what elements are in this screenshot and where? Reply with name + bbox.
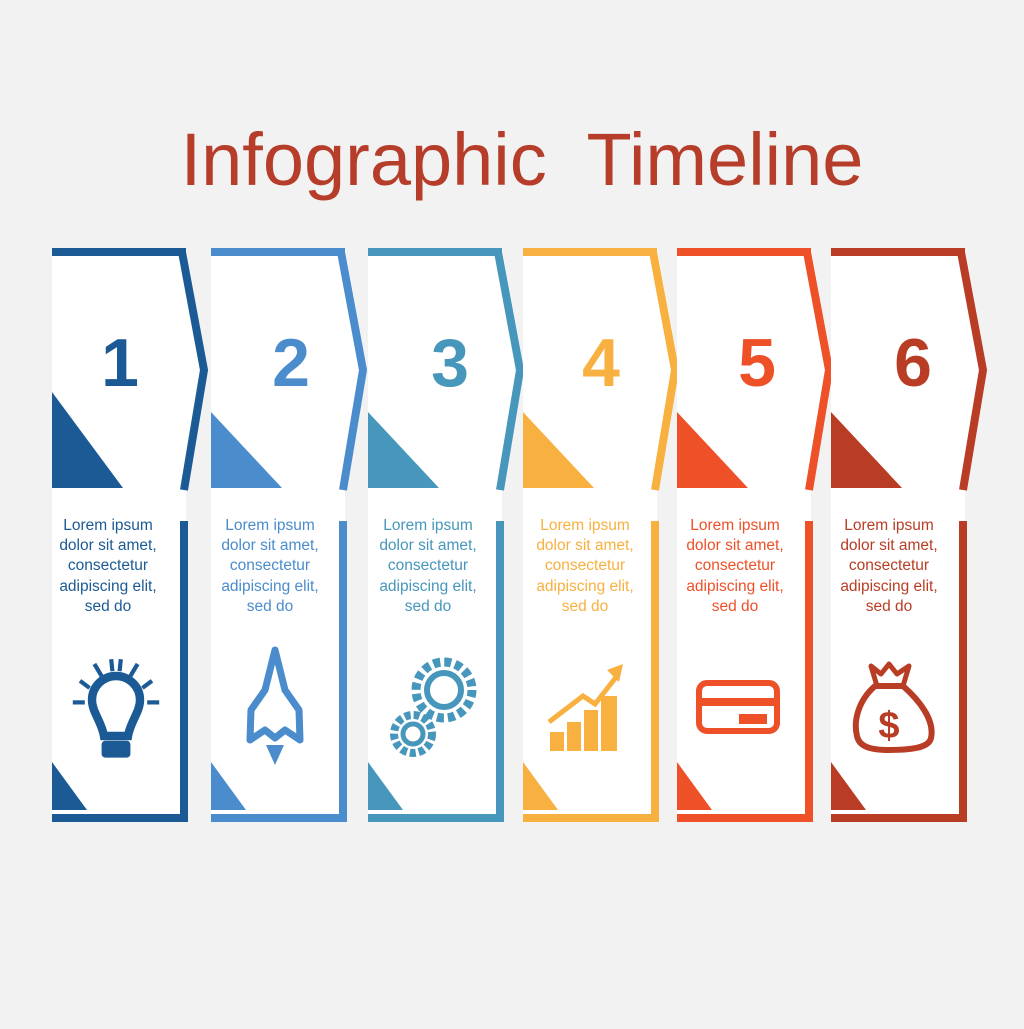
text 1: adipiscing elit, bbox=[59, 578, 157, 595]
text 6: sed do bbox=[866, 598, 912, 615]
text 3: adipiscing elit, bbox=[379, 578, 477, 595]
text 2: Lorem ipsum bbox=[225, 517, 315, 534]
card 5 bbox=[677, 248, 833, 822]
icon: rocket bbox=[250, 650, 300, 765]
icon: money bag bbox=[856, 664, 932, 750]
text 4: sed do bbox=[562, 598, 608, 615]
text 6: consectetur bbox=[849, 557, 929, 574]
text 1: dolor sit amet, bbox=[59, 537, 157, 554]
text 3: sed do bbox=[405, 598, 451, 615]
icon: gears bbox=[394, 662, 472, 753]
text 5: consectetur bbox=[695, 557, 775, 574]
text 4: adipiscing elit, bbox=[536, 578, 634, 595]
text 2: consectetur bbox=[230, 557, 310, 574]
text 6: Lorem ipsum bbox=[844, 517, 934, 534]
text 4: consectetur bbox=[545, 557, 625, 574]
text 3: dolor sit amet, bbox=[379, 537, 477, 554]
card 6 bbox=[831, 248, 987, 822]
text 2: sed do bbox=[247, 598, 293, 615]
number 2: 2 bbox=[272, 325, 310, 401]
card 4 bbox=[523, 248, 679, 822]
text 3: Lorem ipsum bbox=[383, 517, 473, 534]
text 5: sed do bbox=[712, 598, 758, 615]
icon: credit card bbox=[699, 683, 777, 731]
text 4: Lorem ipsum bbox=[540, 517, 630, 534]
number 1: 1 bbox=[101, 325, 139, 401]
text 4: dolor sit amet, bbox=[536, 537, 634, 554]
card 3 bbox=[368, 248, 524, 822]
text 2: dolor sit amet, bbox=[221, 537, 319, 554]
icon: growth chart bbox=[549, 664, 623, 751]
text 3: consectetur bbox=[388, 557, 468, 574]
text 6: adipiscing elit, bbox=[840, 578, 938, 595]
card 2 bbox=[211, 248, 367, 822]
card 1 bbox=[52, 248, 208, 822]
icon: light bulb bbox=[73, 659, 159, 758]
title: Infographic Timeline bbox=[181, 118, 863, 201]
icon: money bag: $ bbox=[878, 705, 900, 747]
number 5: 5 bbox=[738, 325, 776, 401]
text 1: consectetur bbox=[68, 557, 148, 574]
text 1: Lorem ipsum bbox=[63, 517, 153, 534]
number 3: 3 bbox=[431, 325, 469, 401]
number 6: 6 bbox=[894, 325, 932, 401]
text 2: adipiscing elit, bbox=[221, 578, 319, 595]
text 5: Lorem ipsum bbox=[690, 517, 780, 534]
text 5: adipiscing elit, bbox=[686, 578, 784, 595]
text 1: sed do bbox=[85, 598, 131, 615]
text 5: dolor sit amet, bbox=[686, 537, 784, 554]
number 4: 4 bbox=[582, 325, 620, 401]
text 6: dolor sit amet, bbox=[840, 537, 938, 554]
